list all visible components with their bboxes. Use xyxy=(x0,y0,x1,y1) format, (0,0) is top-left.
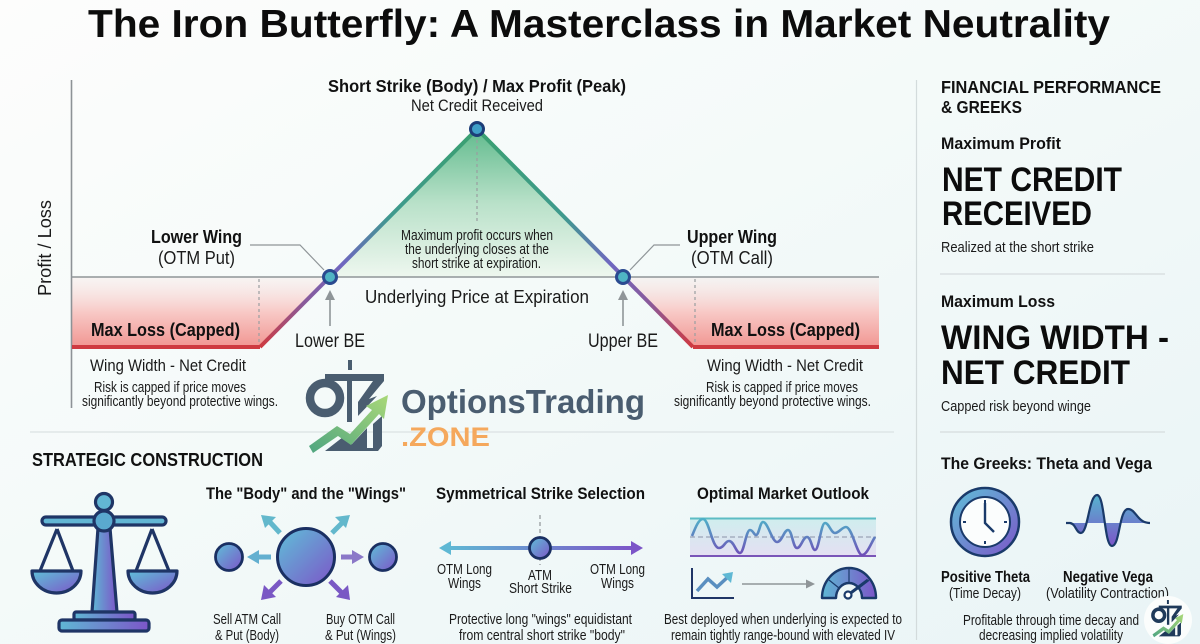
peak label: Short Strike (Body) / Max Profit (Peak) xyxy=(328,76,626,96)
watermark logo xyxy=(309,360,645,453)
upper BE callout: Upper BE xyxy=(588,331,658,352)
theta label xyxy=(941,569,1030,602)
left max loss text: Wing Width - Net Credit xyxy=(90,356,246,375)
icon: vega wave xyxy=(1066,495,1150,546)
maximum loss block: NET CREDIT xyxy=(941,354,1130,392)
payoff chart panel xyxy=(35,76,879,410)
title: The Iron Butterfly: A Masterclass in Market Neutrality xyxy=(88,3,1110,46)
right max loss text xyxy=(674,320,871,410)
chart: range-bound price xyxy=(690,518,876,556)
body caption: & Put (Body) xyxy=(215,628,279,644)
x axis xyxy=(71,276,879,278)
left max loss text xyxy=(82,320,278,410)
strike labels: Wings xyxy=(448,576,481,592)
corner logo badge xyxy=(1144,596,1192,644)
wings caption: & Put (Wings) xyxy=(325,628,396,644)
maximum loss block: WING WIDTH - xyxy=(941,319,1169,357)
greeks caption: Profitable through time decay and xyxy=(963,613,1139,629)
outlook caption: Best deployed when underlying is expected to xyxy=(664,612,902,628)
panel heading: & GREEKS xyxy=(941,97,1022,117)
strike labels xyxy=(437,562,645,597)
icon: volatility gauge xyxy=(822,568,876,598)
strike labels: OTM Long xyxy=(590,562,645,578)
lower wing label: (OTM Put) xyxy=(158,248,235,268)
lower wing label: Lower Wing xyxy=(151,227,242,247)
section heading: STRATEGIC CONSTRUCTION xyxy=(32,450,263,470)
vega label: (Volatility Contraction) xyxy=(1046,586,1169,602)
peak label: Net Credit Received xyxy=(411,97,543,115)
body caption: Sell ATM Call xyxy=(213,612,281,628)
strike caption: from central short strike "body" xyxy=(459,628,625,644)
vega label: Negative Vega xyxy=(1063,569,1153,586)
strike labels: OTM Long xyxy=(437,562,492,578)
maximum profit block: NET CREDIT xyxy=(942,161,1122,199)
icon: trend chart xyxy=(692,568,734,598)
right max loss text: Wing Width - Net Credit xyxy=(707,356,863,375)
logo mark xyxy=(309,360,388,453)
y axis xyxy=(70,80,72,408)
body and wings heading: The "Body" and the "Wings" xyxy=(206,484,406,503)
logo wordmark: OptionsTrading xyxy=(401,383,645,420)
max profit note: short strike at expiration. xyxy=(412,256,541,272)
diagram: symmetrical strike line xyxy=(439,515,643,565)
theta label: Positive Theta xyxy=(941,569,1030,586)
body caption xyxy=(213,612,281,644)
strike caption xyxy=(449,612,632,644)
y axis label: Profit / Loss xyxy=(35,200,55,296)
greeks heading: The Greeks: Theta and Vega xyxy=(941,454,1152,473)
panel heading: FINANCIAL PERFORMANCE xyxy=(941,77,1161,97)
wings caption xyxy=(325,612,396,644)
panel: strategic construction xyxy=(32,450,902,644)
symmetrical strike heading: Symmetrical Strike Selection xyxy=(436,484,645,503)
lower breakeven marker xyxy=(324,270,336,284)
upper wing label: Upper Wing xyxy=(687,227,777,247)
outlook caption: remain tightly range-bound with elevated IV xyxy=(671,628,895,644)
icon: balance scale xyxy=(32,494,177,631)
strike labels: Wings xyxy=(601,576,634,592)
right max loss text: Max Loss (Capped) xyxy=(711,320,860,340)
maximum profit block: Realized at the short strike xyxy=(941,239,1094,256)
upper breakeven marker xyxy=(616,270,630,284)
upper wing label: (OTM Call) xyxy=(691,248,773,268)
greeks caption: decreasing implied volatility xyxy=(979,628,1124,644)
strike caption: Protective long "wings" equidistant xyxy=(449,612,632,628)
upper wing label xyxy=(630,227,777,270)
lower BE callout: Lower BE xyxy=(295,331,365,352)
upper BE callout xyxy=(588,290,658,352)
maximum profit block: RECEIVED xyxy=(942,195,1092,233)
arrow xyxy=(742,580,815,588)
maximum loss block xyxy=(941,293,1169,415)
lower wing label xyxy=(151,227,324,270)
max profit note: Maximum profit occurs when xyxy=(401,228,553,244)
profit zone xyxy=(330,129,623,277)
panel: financial performance and greeks xyxy=(940,77,1169,644)
theta label: (Time Decay) xyxy=(949,586,1021,602)
maximum loss block: Capped risk beyond winge xyxy=(941,398,1091,415)
left max loss text: Max Loss (Capped) xyxy=(91,320,240,340)
logo suffix: .ZONE xyxy=(401,422,490,452)
left max loss text: Risk is capped if price moves xyxy=(94,379,246,396)
market outlook heading: Optimal Market Outlook xyxy=(697,484,869,503)
vega label xyxy=(1046,569,1169,602)
left max loss text: significantly beyond protective wings. xyxy=(82,393,278,410)
strike labels: Short Strike xyxy=(509,581,572,597)
greeks caption xyxy=(963,613,1139,644)
x axis label: Underlying Price at Expiration xyxy=(365,287,589,307)
maximum loss block: Maximum Loss xyxy=(941,293,1055,311)
lower BE callout xyxy=(295,290,365,352)
diagram: body and wings xyxy=(216,515,396,600)
loss zone left xyxy=(72,277,330,347)
loss zone right xyxy=(623,277,879,347)
icon: clock xyxy=(951,488,1019,556)
maximum profit block: Maximum Profit xyxy=(941,135,1061,153)
right max loss text: significantly beyond protective wings. xyxy=(674,393,871,410)
outlook caption xyxy=(664,612,902,644)
maximum profit block xyxy=(941,135,1122,256)
right max loss text: Risk is capped if price moves xyxy=(706,379,858,396)
panel heading xyxy=(941,77,1161,117)
strike labels: ATM xyxy=(528,568,552,584)
max profit note: the underlying closes at the xyxy=(405,242,549,258)
dashed strike guides xyxy=(259,140,695,345)
max profit note xyxy=(401,228,553,272)
peak label xyxy=(328,76,626,115)
wings caption: Buy OTM Call xyxy=(326,612,395,628)
payoff line xyxy=(72,129,879,347)
peak marker xyxy=(470,122,484,136)
